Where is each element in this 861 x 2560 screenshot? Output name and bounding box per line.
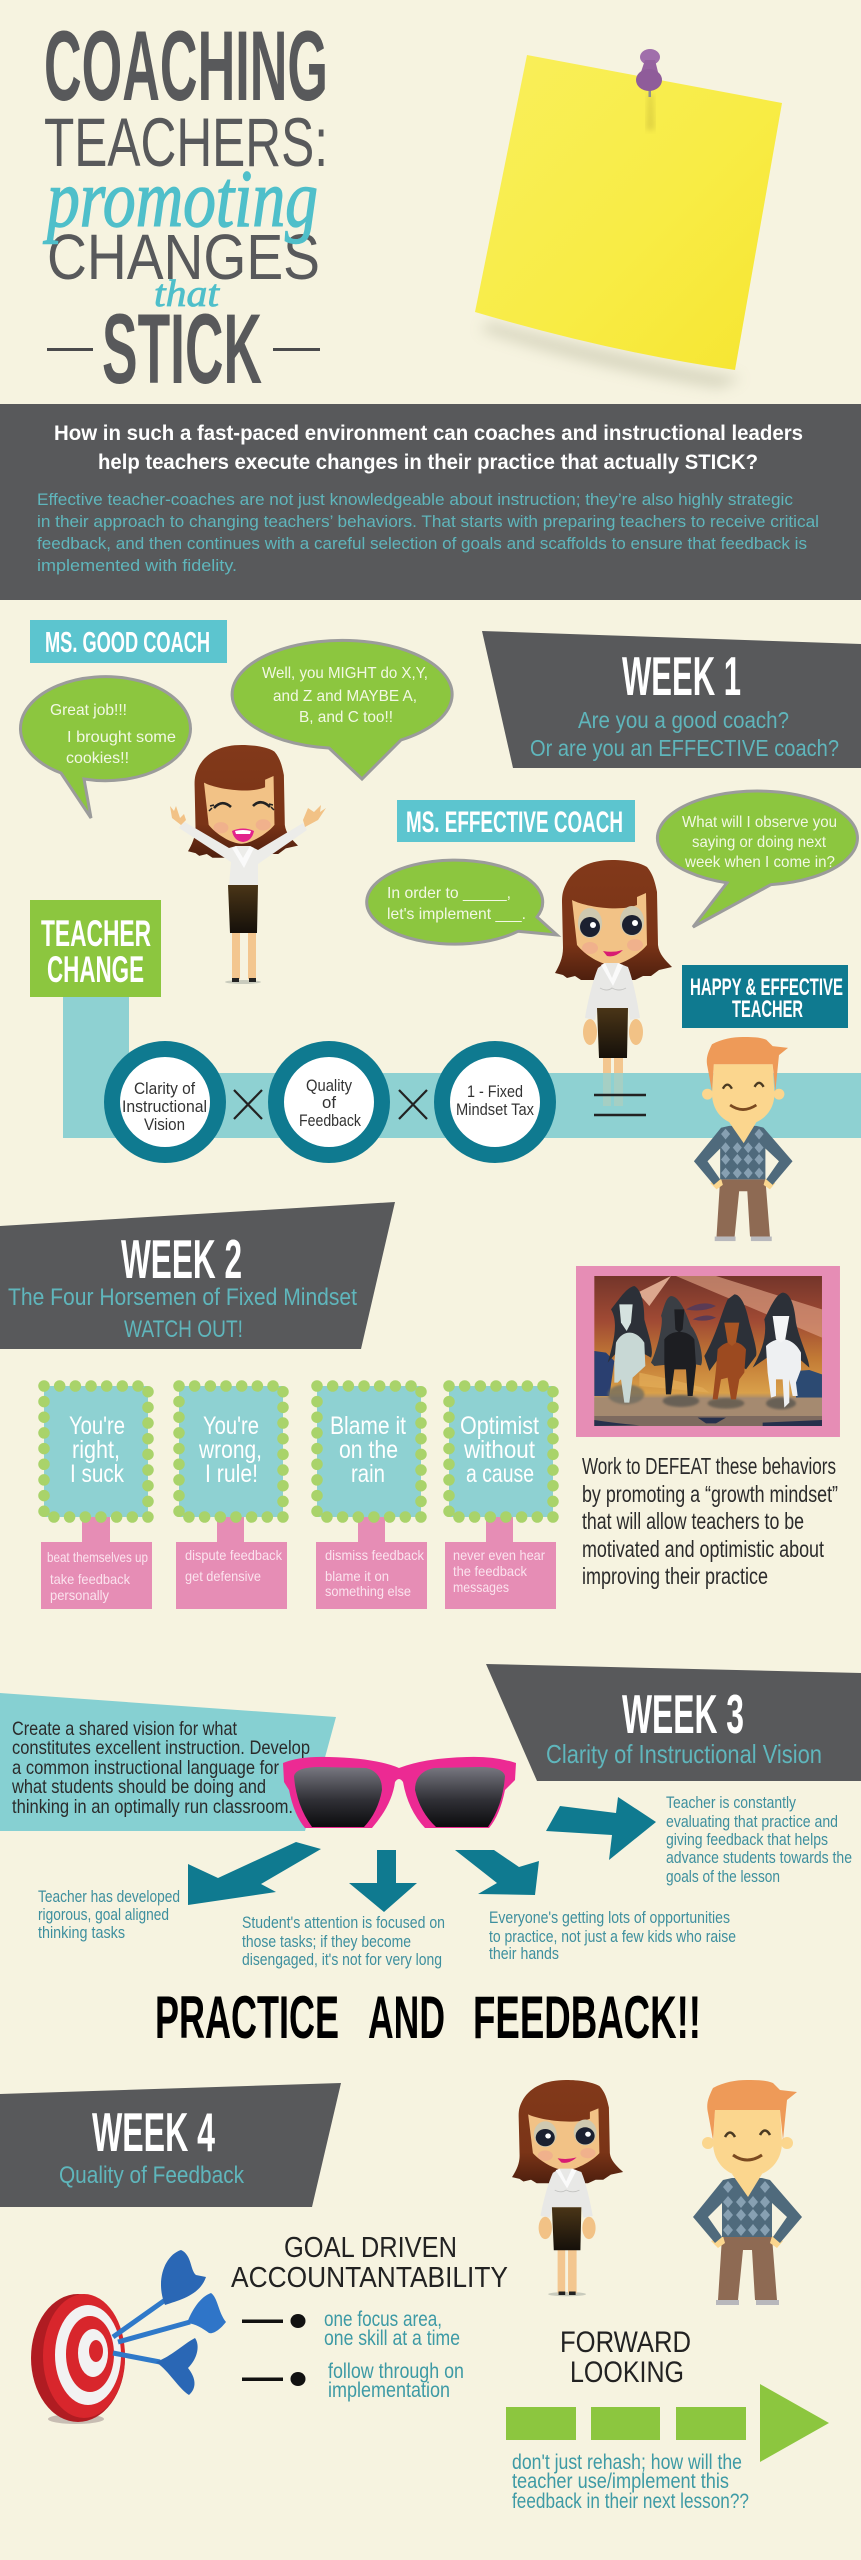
heading: goal driven accountability	[231, 2232, 508, 2294]
text: teacher evaluating: giving feedback that helps	[666, 1830, 828, 1849]
bullet: follow through: follow through on	[328, 2360, 464, 2383]
text: student attention: those tasks; if they become	[242, 1932, 411, 1951]
panel: shared vision: thinking in an optimally run classroom.	[12, 1796, 293, 1818]
circle: fixed mindset tax: 1 - Fixed	[467, 1082, 523, 1101]
horseman 1: you're right, I suck: You're	[69, 1412, 125, 1440]
text: opportunities to practice: their hands	[489, 1944, 559, 1963]
circle: fixed mindset tax	[442, 1049, 548, 1155]
horseman 4: optimist without a cause: messages	[453, 1579, 509, 1595]
horseman 3: blame it on the rain: something else	[325, 1583, 411, 1599]
heading: goal driven accountability: ACCOUNTANTABILITY	[231, 2262, 508, 2294]
horseman 4: optimist without a cause: the feedback	[453, 1563, 528, 1579]
figure: Ms. Good Coach cheering	[170, 745, 326, 984]
circle: quality of feedback: of	[322, 1093, 336, 1112]
horseman 1: you're right, I suck	[41, 1386, 152, 1609]
text: teacher evaluating	[666, 1793, 852, 1886]
heading: practice and feedback: PRACTICE	[155, 1984, 339, 2051]
horseman 4: optimist without a cause: Optimist	[460, 1412, 539, 1440]
week 1 banner: Are you a good coach?	[578, 707, 789, 733]
circle: clarity of instructional vision	[112, 1049, 218, 1155]
icon: target with darts	[31, 2250, 226, 2424]
equals sign	[594, 1095, 646, 1115]
heading: forward looking	[560, 2326, 691, 2389]
horseman 3: blame it on the rain: blame it on	[325, 1568, 389, 1584]
text: don't just rehash: don't just rehash; how will the	[512, 2451, 742, 2474]
intro question: help teachers execute changes in their practice that actually STICK?	[98, 451, 758, 474]
label: happy and effective teacher: TEACHER	[732, 996, 803, 1023]
week 4 banner: WEEK 4	[92, 2101, 215, 2163]
horseman 1: you're right, I suck: beat themselves up	[47, 1549, 148, 1565]
horseman 1: you're right, I suck: right,	[72, 1436, 120, 1464]
intro paragraph	[37, 491, 819, 575]
intro band	[0, 404, 861, 600]
text: thinking tasks: rigorous, goal aligned	[38, 1905, 169, 1924]
horseman 2: you're wrong, I rule	[176, 1386, 287, 1609]
intro paragraph: implemented with fidelity.	[37, 557, 237, 575]
speech bubble: great job	[20, 677, 190, 818]
title: COACHING	[44, 10, 328, 121]
multiplication signs	[234, 1090, 427, 1119]
horseman 4: optimist without a cause: never even hear	[453, 1547, 545, 1563]
horseman 2: you're wrong, I rule: I rule!	[205, 1460, 258, 1488]
text: student attention: Student's attention is focused on	[242, 1913, 445, 1932]
horseman 1: you're right, I suck: I suck	[70, 1460, 124, 1488]
title: TEACHERS:	[44, 104, 328, 181]
heading: practice and feedback: FEEDBACK!!	[473, 1984, 701, 2051]
intro question	[54, 422, 803, 474]
speech bubble: what will I observe: week when I come in?	[684, 854, 835, 871]
label: teacher change: TEACHER	[41, 913, 151, 954]
horseman 3: blame it on the rain: dismiss feedback	[325, 1547, 425, 1563]
speech bubble: what will I observe: saying or doing next	[692, 834, 827, 851]
circle: clarity of instructional vision: Clarity of	[134, 1079, 195, 1098]
horseman 2: you're wrong, I rule: dispute feedback	[185, 1547, 283, 1563]
horseman 1: you're right, I suck: personally	[50, 1587, 109, 1603]
arrow: forward	[506, 2384, 829, 2462]
speech bubble: in order to	[367, 860, 557, 944]
week 4 banner	[0, 2083, 341, 2207]
horseman 3: blame it on the rain: on the	[339, 1436, 398, 1464]
panel: shared vision: what students should be doing and	[11, 1776, 266, 1798]
horseman 2: you're wrong, I rule: wrong,	[198, 1436, 262, 1464]
bullet: one focus area: one skill at a time	[324, 2327, 460, 2350]
text: thinking tasks	[38, 1887, 180, 1942]
label: Ms. Good Coach	[30, 620, 227, 663]
title: STICK	[102, 293, 262, 404]
horseman 3: blame it on the rain	[316, 1386, 427, 1609]
speech bubble: you might do: B, and C too!!	[299, 709, 393, 726]
figure: happy teacher	[694, 1037, 793, 1241]
week 4 banner: Quality of Feedback	[59, 2162, 245, 2189]
arrow: down	[349, 1850, 417, 1912]
horseman 2: you're wrong, I rule: get defensive	[185, 1568, 261, 1584]
bullet: follow through: implementation	[328, 2379, 450, 2402]
week 2 banner	[0, 1202, 395, 1349]
horseman 2: you're wrong, I rule: You're	[203, 1412, 259, 1440]
speech bubble: you might do: and Z and MAYBE A,	[273, 688, 417, 705]
arrow: right	[546, 1797, 656, 1860]
week 2 banner: The Four Horsemen of Fixed Mindset	[8, 1284, 357, 1311]
circle: clarity of instructional vision: Vision	[144, 1115, 185, 1134]
figure: coach	[512, 2080, 623, 2296]
heading: practice and feedback	[155, 1984, 701, 2051]
text: teacher evaluating: goals of the lesson	[666, 1867, 780, 1886]
panel: shared vision: Create a shared vision for what	[12, 1718, 237, 1740]
label: Ms. Good Coach: MS. GOOD COACH	[45, 627, 210, 659]
text: thinking tasks: Teacher has developed	[38, 1887, 180, 1906]
title: that	[154, 273, 221, 315]
circle: clarity of instructional vision: Instructional	[122, 1097, 207, 1116]
text: defeat these behaviors	[582, 1453, 838, 1589]
week 1 banner	[482, 631, 861, 768]
icon: sunglasses	[283, 1757, 516, 1828]
panel: shared vision: a common instructional language for	[12, 1757, 279, 1779]
label: teacher change: CHANGE	[47, 949, 144, 990]
week 1 banner: WEEK 1	[622, 645, 741, 707]
week 3 banner: WEEK 3	[622, 1683, 744, 1745]
circle: fixed mindset tax: Mindset Tax	[456, 1100, 534, 1119]
intro paragraph: in their approach to changing teachers’ behaviors. That starts with preparing teachers to receive critical	[37, 513, 819, 531]
week 2 banner: WEEK 2	[121, 1228, 242, 1290]
text: don't just rehash	[512, 2451, 749, 2513]
week 3 banner	[486, 1664, 861, 1781]
arrow: down right	[455, 1850, 539, 1895]
painting: four horsemen	[576, 1266, 840, 1437]
horseman 3: blame it on the rain: rain	[351, 1460, 385, 1488]
speech bubble: what will I observe: What will I observe you	[682, 814, 837, 831]
text: opportunities to practice: Everyone's getting lots of opportunities	[489, 1908, 730, 1927]
speech bubble: in order to: In order to _____,	[387, 885, 511, 902]
text: don't just rehash: teacher use/implement this	[512, 2470, 729, 2493]
panel: shared vision	[0, 1693, 336, 1831]
horseman 1: you're right, I suck: take feedback	[50, 1571, 131, 1587]
speech bubble: you might do: Well, you MIGHT do X,Y,	[262, 665, 428, 682]
label: Ms. Effective Coach	[397, 800, 635, 842]
bullet: one focus area	[242, 2308, 460, 2350]
text: opportunities to practice	[489, 1908, 736, 1963]
circle: quality of feedback: Feedback	[299, 1111, 361, 1130]
heading: forward looking: LOOKING	[570, 2356, 684, 2389]
text: thinking tasks: thinking tasks	[38, 1923, 125, 1942]
speech bubble: great job: cookies!!	[66, 750, 129, 767]
label: happy and effective teacher	[682, 965, 848, 1028]
speech bubble: in order to: let's implement ___.	[387, 906, 526, 923]
text: defeat these behaviors: improving their practice	[582, 1563, 768, 1589]
speech bubble: great job: Great job!!!	[50, 702, 127, 719]
intro question: How in such a fast-paced environment can coaches and instructional leaders	[54, 422, 803, 445]
equation band	[63, 997, 861, 1138]
speech bubble: great job: I brought some	[67, 729, 176, 746]
figure: Ms. Effective Coach	[555, 860, 672, 1112]
label: Ms. Effective Coach: MS. EFFECTIVE COACH	[406, 806, 623, 839]
figure: teacher	[693, 2080, 802, 2305]
heading: practice and feedback: AND	[368, 1984, 445, 2051]
sticky note with pin	[475, 49, 782, 388]
text: teacher evaluating: Teacher is constantly	[666, 1793, 796, 1812]
bullet: follow through	[242, 2360, 464, 2402]
speech bubble: you might do	[232, 640, 452, 779]
circle: quality of feedback	[276, 1049, 382, 1155]
title: CHANGES	[47, 221, 320, 293]
intro paragraph: Effective teacher-coaches are not just knowledgeable about instruction; they’re also highly strategic	[37, 491, 793, 509]
heading: goal driven accountability: GOAL DRIVEN	[284, 2232, 457, 2264]
title: promoting	[43, 153, 318, 244]
horseman 4: optimist without a cause: a cause	[466, 1460, 534, 1488]
week 2 banner: WATCH OUT!	[124, 1316, 243, 1343]
text: opportunities to practice: to practice, not just a few kids who raise	[489, 1927, 736, 1946]
horseman 4: optimist without a cause	[445, 1386, 556, 1609]
text: don't just rehash: feedback in their next lesson??	[512, 2490, 749, 2513]
intro paragraph: feedback, and then continues with a careful selection of goals and scaffolds to ensure that feedback is	[37, 535, 807, 553]
speech bubble: what will I observe	[657, 791, 857, 927]
heading: forward looking: FORWARD	[560, 2326, 691, 2359]
panel: shared vision: constitutes excellent instruction. Develop	[12, 1737, 310, 1759]
arrow: down left	[188, 1842, 321, 1905]
circle: quality of feedback: Quality	[306, 1076, 352, 1095]
text: student attention: disengaged, it's not for very long	[242, 1950, 442, 1969]
title	[43, 10, 328, 404]
bullet: one focus area: one focus area,	[324, 2308, 442, 2331]
horseman 3: blame it on the rain: Blame it	[330, 1412, 406, 1440]
horseman 4: optimist without a cause: without	[463, 1436, 535, 1464]
coach legs seen through the band	[603, 1073, 623, 1106]
text: student attention	[242, 1913, 445, 1969]
label: teacher change	[30, 900, 161, 997]
